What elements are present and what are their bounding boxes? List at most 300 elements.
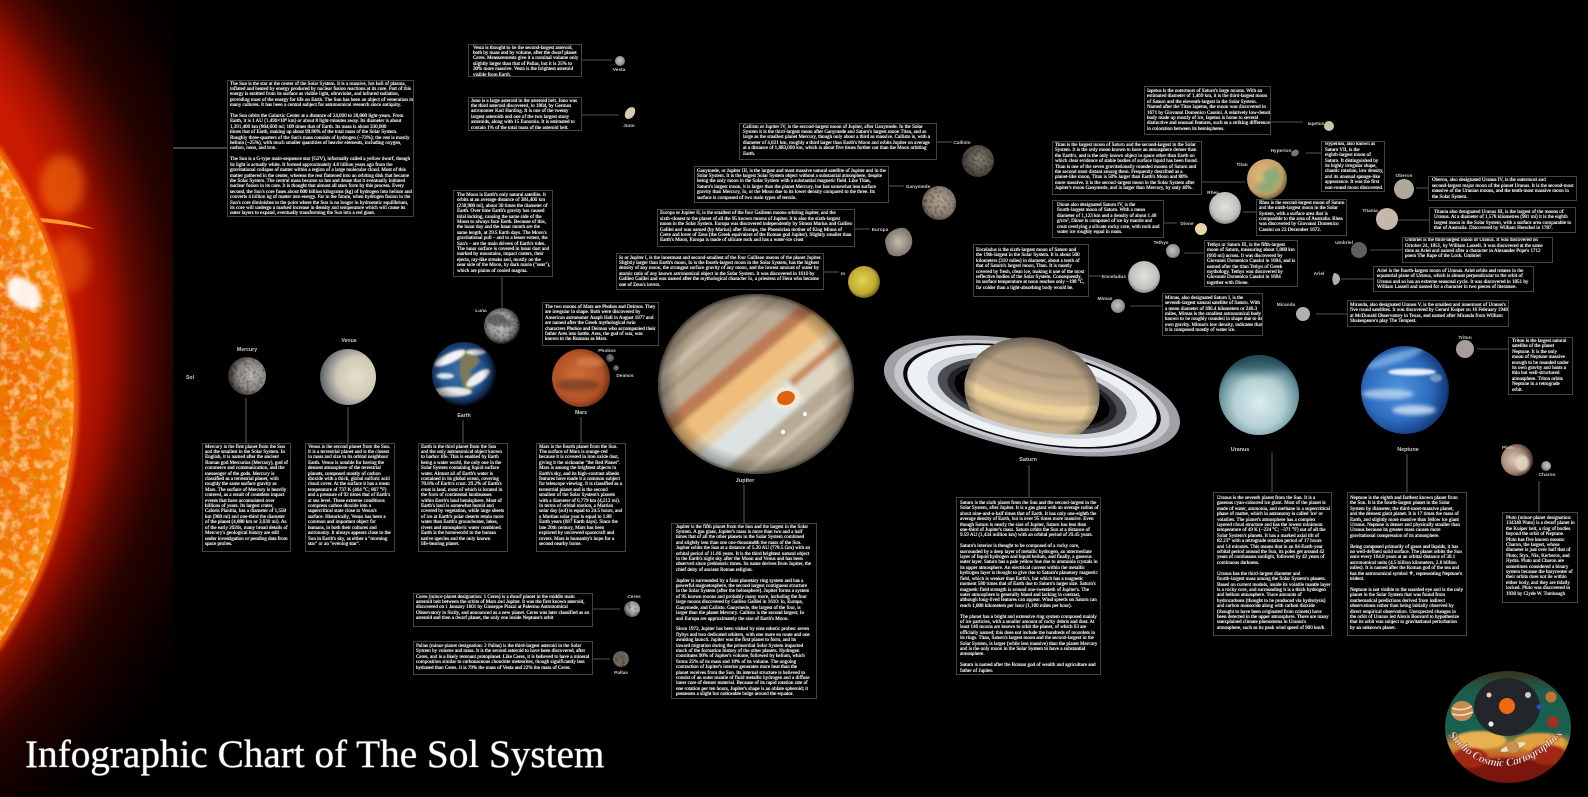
text block: Mimas: known to be roughly rounded in shape due to its: [1165, 316, 1262, 322]
text block: Venus: common and important object for: [308, 519, 376, 525]
asteroid: Juno: [623, 105, 637, 129]
text block: Neptune: observations rather than being initially observed by: [1350, 603, 1454, 609]
moon: Luna: [475, 308, 520, 344]
text block: Rhea: and the ninth-largest moon in the Solar: [1259, 205, 1338, 211]
text block: Venus: densest atmosphere of the terrestrial: [308, 465, 381, 471]
text block: Europa: Earth's Moon, Europa is made of silicate rock and has a water-ice crust: [660, 237, 803, 243]
text block: Io: Slightly larger than Earth's moon, Io is the fourth-largest moon in the Solar System, has the highest: [619, 260, 819, 266]
text block: Callisto: [739, 123, 937, 160]
text block: Rhea: [1256, 199, 1347, 236]
text block: Hyperion: chaotic rotation, low density,: [1325, 168, 1383, 174]
moon: Ganymede: Ganymede: [906, 184, 931, 190]
text block: Sun: its light is actually white. It formed approximately 4.6 billion years ago from the: [230, 162, 392, 168]
text block: Iapetus: distinctive and unusual features, such as a striking difference: [1147, 120, 1270, 126]
text block: Venus: Venus is the second planet from the Sun.: [308, 444, 390, 450]
connector: Earth: [462, 420, 464, 443]
text block: Iapetus: body made up mostly of ice, Iapetus is home to several: [1147, 115, 1258, 121]
text block: Titania: Titania also designated Uranus III, is the largest of the moons of: [1434, 209, 1564, 215]
moon: Mimas: [1098, 296, 1125, 313]
moon: Enceladus: Enceladus: [1102, 274, 1126, 280]
text block: moons of Mars: [542, 302, 659, 346]
connector: Pallas: [593, 658, 610, 660]
text block: Triton: moon of Neptune massive: [1512, 354, 1565, 360]
text block: moons of Mars: father Ares into battle. Ares, the god of war, was: [545, 331, 643, 337]
the Sun: [0, 142, 95, 654]
text block: Pluto: 1930 by Clyde W. Tombaugh: [1506, 591, 1565, 597]
moon: Mimas: Mimas: [1098, 296, 1113, 302]
moon: Enceladus: [1102, 261, 1160, 293]
moon: Miranda: Miranda: [1277, 302, 1296, 308]
text block: Juno: astronomer Karl Harding. It is one of the twenty: [471, 108, 568, 114]
text block: Mars: second nearby home.: [539, 541, 582, 547]
text block: Rhea: comparable to the area of Australia. Rhea: [1259, 216, 1343, 222]
text block: Earth: of ice at Earth's polar deserts retain more: [421, 514, 504, 520]
text block: Neptune: mathematical predictions derived from indirect: [1350, 598, 1445, 604]
text block: Jupiter: observed since prehistoric times. Its name derives from Jupiter, the: [676, 561, 811, 567]
planet: Mercury: [228, 347, 266, 395]
text block: moons of Mars: The two moons of Mars are Phobos and Deimos. They: [545, 304, 655, 310]
text block: Tethys: together with Dione.: [1207, 280, 1249, 286]
text block: Jupiter: inward migration during the primordial Solar System impacted: [676, 643, 803, 649]
text block: Jupiter: Jupiter is the fifth planet from the Sun and the largest in the Solar: [676, 524, 808, 530]
text block: Ganymede: gravity than Mercury, Io, or the Moon due to its lower density compared to the three. Its: [697, 189, 875, 195]
text block: Moon: The Moon is Earth's only natural satellite. It: [457, 192, 546, 198]
text block: Pluto: the Kuiper belt, a ring of bodies: [1506, 526, 1570, 532]
text block: Saturn: The planet has a bright and extensive ring system composed mainly: [960, 614, 1097, 620]
text block: Hyperion: its highly irregular shape,: [1325, 163, 1377, 169]
text block: Mars: explored by uncrewed spacecraft and: [539, 530, 614, 536]
connector: Vesta: [582, 59, 612, 61]
text block: Saturn: field, which is weaker than Earth's, but which has a magnetic: [960, 576, 1083, 582]
text block: Earth: within Earth's land hemisphere. Most of: [421, 498, 502, 504]
text block: Dione: crust overlying a silicate rocky core, with rock and: [1057, 224, 1159, 230]
text block: Mimas: [1162, 293, 1263, 336]
text block: Sun: providing most of the energy for life on Earth. The Sun has been an object of veneration in: [230, 97, 413, 103]
text block: Juno: contain 1% of the total mass of the asteroid belt.: [471, 125, 569, 131]
text block: Saturn: layer of liquid hydrogen and liquid helium, and finally, a gaseous: [960, 554, 1092, 560]
text block: Moon: The lunar surface is covered in lunar dust and: [457, 246, 549, 252]
text block: Vesta: slightly larger than that of Pallas, but it is 25% to: [473, 61, 572, 67]
text block: Saturn: surrounded by a deep layer of metallic hydrogen, an intermediate: [960, 549, 1092, 555]
text block: Mimas: Mimas, also designated Saturn I, is the: [1165, 295, 1243, 301]
text block: Mimas: a mean diameter of 396.4 kilometers or 246.3: [1165, 306, 1257, 312]
text block: Neptune: gravitational compression of its atmosphere.: [1350, 533, 1440, 539]
text block: Earth: and the only astronomical object known: [421, 449, 502, 455]
asteroid: Ceres: Ceres: [627, 594, 641, 600]
text block: Neptune: Uranus because its greater mass causes more: [1350, 527, 1441, 533]
text block: Neptune: Being composed primarily of gases and liquids, it has: [1350, 544, 1458, 550]
text block: Pluto: sometimes considered a binary: [1506, 564, 1568, 570]
text block: Jupiter: consist of an outer mantle of fluid metallic hydrogen and a diffuse: [676, 675, 809, 681]
text block: Earth: the form of continental landmasses: [421, 492, 492, 498]
text block: Saturn: average density of Earth, but is over 95 times more massive. Even: [960, 516, 1094, 522]
text block: Iapetus: estimated diameter of 1,469 km, it is the third-largest moon: [1147, 93, 1267, 99]
text block: Moon: gravitational pull – and to a lesser extent, the: [457, 235, 548, 241]
moon: Iapetus: Iapetus: [1308, 121, 1325, 127]
text block: Jupiter: planet receives from the Sun. Its internal structure is believed to: [676, 670, 805, 676]
text block: Hyperion: eighth-largest moon of: [1325, 152, 1371, 158]
text block: Venus: surface. Historically, Venus has been a: [308, 514, 386, 520]
connector: Iapetus: [1271, 121, 1303, 123]
text block: Enceladus: [973, 244, 1089, 297]
text block: Jupiter: and slightly less than one one-thousandth the mass of the Sun.: [676, 540, 801, 546]
text block: Neptune: planet in the Solar System that was found from: [1350, 592, 1445, 598]
text block: Mars: In terms of orbital motion, a Martian: [539, 503, 613, 509]
planet: Venus: [320, 338, 376, 405]
text block: Ganymede: Saturn's largest moon, it is larger than the planet Mercury, but has somewhat less surface: [697, 184, 876, 190]
text block: Triton: enough to be rounded under: [1512, 360, 1569, 366]
connector: Callisto: [937, 141, 952, 143]
text block: Pluto: Charon, the largest, whose: [1506, 542, 1560, 548]
text block: Pluto: Pluto (minor-planet designation:: [1506, 515, 1572, 521]
text block: Io: Galileo Galilei and was named after the mythological character Io, a priestess of Hera who became: [619, 276, 819, 282]
text block: Mercury: [202, 443, 291, 552]
text block: Jupiter: flybys and two dedicated orbiters, with one more en route and one: [676, 632, 810, 638]
text block: Mars: features have made it a common subject: [539, 476, 620, 482]
text block: Callisto: large as the smallest planet Mercury, though only about a third as massive. Callisto is, with a: [743, 134, 930, 140]
text block: Mars: smallest of the Solar System's planets: [539, 492, 615, 498]
text block: Mars: Mars is among the brightest objects in: [539, 465, 616, 471]
text block: Pluto: system because the barycenter of: [1506, 569, 1573, 575]
text block: Io: density of any moon, the strongest surface gravity of any moon, and the lowest amount of water by: [619, 265, 819, 271]
text block: Mercury: and the smallest in the Solar System. In: [205, 449, 285, 455]
moon: Tethys: Tethys: [1153, 240, 1169, 246]
text block: Jupiter: of 95 known moons and probably many more, including the four: [676, 594, 807, 600]
connector: Dione: [1164, 222, 1177, 224]
text block: Venus: humans, in both their cultures and: [308, 525, 377, 531]
text block: Callisto: at a distance of 1,883,000 km, which is about five times further out than the Moon orbiting: [743, 145, 926, 151]
text block: moons of Mars: are named after the Greek mythological twin: [545, 320, 636, 326]
text block: Uranus: (thought to have been originated from comets) have: [1217, 609, 1322, 615]
moon: Deimos: Deimos: [616, 373, 634, 379]
text block: Mercury: cratered, as a result of countless impact: [205, 492, 284, 498]
text block: Hyperion: and its unusual sponge-like: [1325, 174, 1380, 180]
text block: Earth: 70.8% of Earth's crust. 29.2% of Earth's: [421, 481, 502, 487]
text block: Triton: [1508, 337, 1573, 395]
text block: Pluto: Pluto; Styx, Nix, Kerberos, and: [1506, 553, 1570, 559]
moon: Rhea: [1207, 190, 1241, 224]
connector: Europa: [855, 228, 870, 230]
text block: Dione: [1052, 200, 1164, 238]
text block: Sun: its core will undergo a marked increase in density and temperature which will cause its: [230, 205, 405, 211]
text block: Sun: matter gathered in the center, whereas the rest flattened into an orbiting disk that became: [230, 172, 409, 178]
moon: Oberon: Oberon: [1395, 173, 1413, 179]
text block: Moon: same length, at 29.5 Earth days. The Moon's: [457, 230, 547, 236]
text block: Triton: its own gravity and hosts a: [1512, 365, 1566, 371]
text block: Sun: nuclear fusion in its core. It is thought that almost all stars form by this process. Every: [230, 183, 404, 189]
text block: Sun: [227, 80, 414, 217]
text block: Moon: [453, 190, 553, 277]
text block: Europa: Europa or Jupiter II, is the smallest of the four Galilean moons orbiting Jupiter, and the: [660, 210, 836, 216]
text block: Neptune: by an unknown planet.: [1350, 625, 1396, 631]
text block: Titan: the second most distant among them. Frequently described as a: [1055, 169, 1183, 175]
text block: Venus: star" or an "evening star".: [308, 541, 360, 547]
text block: Europa: Galilei and was named (by Marius) after Europa, the Phoenician mother of King Minos of: [660, 227, 842, 233]
text block: Saturn: magnetic field strength is around one-twentieth of Jupiter's. The: [960, 586, 1089, 592]
text block: Mars: a Martian solar year is equal to 1.88: [539, 514, 612, 520]
text block: Sun: Sun's core diminishes to the point where the Sun is no longer in hydrostatic equilibrium,: [230, 200, 408, 206]
connector: Mimas: [1130, 305, 1162, 307]
moon: Miranda: [1277, 302, 1310, 321]
moon: Deimos: [613, 365, 634, 379]
text block: Neptune: astronomical units (4.5 billion kilometers, 2.8 billion: [1350, 560, 1457, 566]
text block: Earth: to harbor life. This is enabled by Earth: [421, 454, 499, 460]
moon: Charon: Charon: [1539, 472, 1555, 478]
text block: Uranus: Uranus is the seventh planet from the Sun. It is a: [1217, 495, 1315, 501]
text block: Mercury: Mercury's geological history are still: [205, 530, 279, 536]
text block: Saturn: hydrogen layer is thought to give rise to Saturn's planetary magnetic: [960, 570, 1098, 576]
text block: Mars: Mars is the fourth planet from the Sun.: [539, 444, 618, 450]
text block: Sun: inflated and heated by energy produced by nuclear fusion reactions at its core. Part of this: [230, 86, 411, 92]
text block: Pallas: [413, 641, 593, 675]
moon: Phobos: [598, 348, 616, 362]
text block: Uranus: unexplained climate phenomena in Uranus's: [1217, 619, 1306, 625]
text block: Mercury: classified as a terrestrial planet, with: [205, 476, 279, 482]
text block: Neptune: System by diameter, the third-most-massive planet,: [1350, 506, 1454, 512]
text block: Enceladus: reflective bodies of the Solar System. Consequently,: [976, 274, 1082, 280]
text block: Miranda: Shakespeare's play The Tempest.: [1350, 318, 1417, 324]
text block: Titania: [1429, 207, 1576, 233]
text block: Mercury: Roman god Mercurius (Mercury), god of: [205, 460, 288, 466]
moon: Titania: Titania: [1362, 208, 1378, 214]
moon: Io: Io: [841, 271, 845, 277]
connector: Sun: [173, 147, 227, 149]
text block: Enceladus: covered by fresh, clean ice, making it one of the most: [976, 269, 1084, 275]
text block: Uranus: atmosphere, such as its peak wind speed of 900 km/h: [1217, 625, 1324, 631]
text block: Uranus: made of water, ammonia, and methane in a supercritical: [1217, 506, 1330, 512]
moon: Umbriel: [1335, 240, 1367, 258]
text block: Neptune: the Sun. It is the fourth-largest planet in the Solar: [1350, 500, 1450, 506]
connector: Oberon: [1416, 187, 1428, 189]
planet: Mars: [552, 349, 610, 416]
text block: Jupiter: Since 1973, Jupiter has been visited by nine robotic probes: seven: [676, 626, 809, 632]
text block: Moon: marked by mountains, impact craters, their: [457, 251, 543, 257]
moon: Titan: Titan: [1236, 162, 1248, 168]
text block: Mercury: English, it is named after the ancient: [205, 454, 279, 460]
text block: Rhea: Rhea is the second-largest moon of Saturn: [1259, 200, 1344, 206]
text block: Uranus: Based on current models, inside its volatile mantle layer: [1217, 582, 1330, 588]
text block: Juno: [468, 97, 582, 131]
text block: Pluto: 134340 Pluto) is a dwarf planet in: [1506, 520, 1575, 526]
text block: Oberon: [1428, 176, 1577, 201]
text block: Hyperion: Hyperion, also known as: [1325, 141, 1375, 147]
text block: Saturn: though Saturn is nearly the size of Jupiter, Saturn has less than: [960, 522, 1086, 528]
text block: Juno: largest asteroids and one of the two largest stony: [471, 114, 569, 120]
text block: Earth: life-bearing planet.: [421, 541, 459, 547]
text block: Saturn: its rings. Titan, Saturn's largest moon and the second-largest in the: [960, 635, 1094, 641]
text block: Uranus: and 14 minutes. This means that in an 84-Earth-year: [1217, 544, 1323, 550]
text block: Neptune: trident.: [1350, 576, 1364, 582]
text block: Mercury: Mars. The surface of Mercury is heavily: [205, 487, 286, 493]
text block: Rhea: System, with a surface area that is: [1259, 210, 1328, 216]
connector: Uranus: [1271, 452, 1273, 492]
text block: Uranus: Solar System's planets. It has a marked axial tilt of: [1217, 533, 1319, 539]
text block: Enceladus: far colder than a light-absorbing body would be.: [976, 285, 1074, 291]
text block: Mercury: space probes.: [205, 541, 232, 547]
text block: Saturn: 9.59 AU (1,434 million km) with an orbital period of 29.45 years.: [960, 532, 1093, 538]
moon: Oberon: [1394, 173, 1414, 199]
text block: Moon: orbits at an average distance of 384,400 km: [457, 197, 545, 203]
text block: Saturn: and is the only moon in the Solar System to have a substantial: [960, 646, 1085, 652]
text block: Miranda: five round satellites. It was discovered by Gerard Kuiper on 16 February 1948: [1350, 307, 1508, 313]
planet: Venus: Venus: [341, 338, 357, 344]
text block: Neptune: Earth, and slightly more massive than fellow ice giant: [1350, 517, 1459, 523]
text block: Venus: astronomy. It always appears close to the: [308, 530, 391, 536]
text block: Tethys: named after the titan Tethys of Greek: [1207, 264, 1282, 270]
text block: Enceladus: Enceladus is the sixth-largest moon of Saturn and: [976, 247, 1076, 253]
text block: Earth: Earth's land is somewhat humid and: [421, 503, 494, 509]
text block: Enceladus: its surface temperature at noon reaches only −198 °C,: [976, 279, 1084, 285]
text block: Venus: Earth. Venus is notable for having the: [308, 460, 384, 466]
text block: Saturn: outer atmosphere is generally bland and lacking in contrast,: [960, 592, 1080, 598]
text block: Hyperion: non-round moon discovered.: [1325, 185, 1383, 191]
text block: Uranus: layered cloud structure and has the lowest minimum: [1217, 522, 1323, 528]
text block: Uranus: gaseous cyan-coloured ice giant. Most of the planet is: [1217, 500, 1326, 506]
text block: Titan: [1052, 141, 1202, 195]
text block: Saturn: about nine-and-a-half times that of Earth. It has only one-eighth the: [960, 511, 1096, 517]
text block: Moon: near side of the Moon, by dark maria ("seas"),: [457, 262, 550, 268]
text block: Uranus: 82.23° with a retrograde rotation period of 17 hours: [1217, 538, 1321, 544]
text block: Neptune: that its orbit was subject to gravitational perturbation: [1350, 619, 1457, 625]
text block: Venus: cloud cover. At the surface it has a mean: [308, 481, 390, 487]
text block: Callisto: Callisto or Jupiter IV, is the second-largest moon of Jupiter, after Ganymede. In the Solar: [743, 124, 923, 130]
text block: Dione: fourth-largest moon of Saturn. With a mean: [1057, 207, 1145, 213]
text block: Europa: sixth-closest to the planet of all the 95 known moons of Jupiter. It is also the sixth-largest: [660, 216, 840, 222]
text block: Saturn: one-third of Jupiter's mass. Saturn orbits the Sun at a distance of: [960, 527, 1090, 533]
text block: Earth: water. Almost all of Earth's water is: [421, 471, 493, 477]
moon: Ganymede: [906, 184, 956, 220]
logo: Studio Cosmic Cartographics badge: Studio Cosmic Cartographics: [1448, 731, 1562, 766]
text block: Dione: g/cm³, Dione is composed of ice by mantle and: [1057, 218, 1152, 224]
text block: Jupiter: contraction of Jupiter's interior generates more heat than the: [676, 664, 797, 670]
moon: Phobos: Phobos: [598, 348, 616, 354]
asteroid: Ceres: [624, 594, 641, 617]
text block: Vesta: both by mass and by volume, after the dwarf planet: [473, 50, 577, 56]
text block: Uranus: hydrocarbons (thought to be produced via hydrolysis): [1217, 598, 1326, 604]
moon: Luna: Luna: [475, 308, 487, 314]
text block: Ariel: Ariel is the fourth-largest moon of Uranus. Ariel orbits and rotates in the: [1377, 268, 1523, 274]
moon: Hyperion: [1271, 148, 1300, 158]
text block: Neptune: [1347, 492, 1467, 636]
text block: Sun: gravitational collapse of matter within a region of a large molecular cloud. Most of this: [230, 167, 406, 173]
text block: Oberon: Oberon, also designated Uranus IV, is the outermost and: [1432, 177, 1546, 183]
text block: Neptune: Neptune is the eighth and farthest known planet from: [1350, 495, 1458, 501]
text block: Mars: The surface of Mars is orange-red: [539, 449, 608, 455]
text block: Miranda: Miranda, also designated Uranus V, is the smallest and innermost of Uranus's: [1350, 302, 1506, 308]
connector: Miranda: [1316, 313, 1347, 315]
connector: Pluto: [1538, 481, 1540, 512]
text block: Sun: carbon, neon, and iron.: [230, 145, 277, 151]
text block: Vesta: Vesta is thought to be the second-largest asteroid,: [473, 45, 573, 51]
moon: Europa: [872, 227, 912, 256]
text block: Earth: rivers and atmospheric water combined.: [421, 525, 502, 531]
connector: Mars: [580, 417, 582, 443]
text block: Mercury: commerce and communication, and the: [205, 465, 284, 471]
moon: Titan: [1236, 159, 1287, 199]
text block: Uranus: [1213, 492, 1332, 636]
text block: Mars: because it is covered in iron oxide dust,: [539, 454, 619, 460]
text block: Jupiter: System. A gas giant, Jupiter's mass is more than two and a half: [676, 529, 803, 535]
text block: Ariel: William Lassell and named for a character in two pieces of literature.: [1377, 284, 1517, 290]
text block: Io: Io or Jupiter I, is the innermost and second-smallest of the four Galilean moons of the planet Jupiter.: [619, 255, 822, 261]
text block: Pallas: hydrated than Ceres. It is 79% the mass of Vesta and 22% the mass of Ceres.: [416, 665, 571, 671]
connector: Ganymede: [889, 185, 904, 187]
text block: Moon: Moon to always face Earth. Because of this,: [457, 219, 546, 225]
text block: Callisto: Earth.: [743, 151, 755, 157]
text block: Venus: [305, 443, 395, 552]
text block: Titan: planet-like moon, Titan is 50% larger than Earth's Moon and 80%: [1055, 174, 1188, 180]
text block: Venus: compress carbon dioxide into a: [308, 503, 371, 509]
planet: Uranus: Uranus: [1231, 447, 1249, 453]
text block: Iapetus: 1671 by Giovanni Domenico Cassini. A relatively low-density: [1147, 110, 1271, 116]
text block: Sun: The Sun is a G-type main-sequence star (G2V), informally called a yellow dwarf, though: [230, 156, 410, 162]
asteroid: Pallas: [613, 651, 629, 676]
text block: Ceres: [413, 593, 593, 627]
connector: Jupiter: [743, 485, 745, 523]
moon: Dione: Dione: [1180, 221, 1194, 227]
text block: Ganymede: Solar System. It is the largest Solar System object without a substantial atmosphere, despite: [697, 173, 882, 179]
text block: Mars: [536, 443, 626, 552]
text block: Mars: giving it the nickname "the Red Planet".: [539, 460, 620, 466]
text block: Pluto: their orbits does not lie within: [1506, 574, 1567, 580]
text block: Umbriel: [1402, 237, 1553, 263]
text block: Umbriel: poem The Rape of the Lock. Umbriel: [1405, 253, 1481, 259]
text block: Iapetus: Named after the Titan Iapetus, the moon was discovered in: [1147, 104, 1266, 110]
text block: Callisto: diameter of 4,821 km, roughly a third larger than Earth's Moon and orbits Jupiter on average: [743, 140, 930, 146]
text block: Sun: times that of Earth, making up about 99.86% of the total mass of the Solar System.: [230, 129, 397, 135]
text block: Mercury: roughly the same surface gravity as: [205, 481, 277, 487]
text block: Titan: Jupiter's moon Ganymede, and is larger than Mercury, by only 40%.: [1055, 185, 1193, 191]
text block: Oberon: massive of the Uranian moons, and the tenth-most massive moon in: [1432, 188, 1569, 194]
text block: Hyperion: appearance. It was the first: [1325, 179, 1379, 185]
text block: moons of Mars: American astronomer Asaph Hall in August 1877 and: [545, 315, 653, 321]
asteroid: Vesta: Vesta: [613, 67, 626, 73]
text block: Jupiter: much of the formation history of the other planets. Hydrogen: [676, 648, 799, 654]
text block: Hyperion: Saturn VII, is the: [1325, 147, 1360, 153]
moon: Charon: [1539, 461, 1555, 478]
connector: Triton: [1477, 348, 1508, 350]
text block: Europa: moon in the Solar System. Europa was discovered independently by Simon Marius and Galileo: [660, 221, 852, 227]
text block: Jupiter: in the Solar System (after the heliosphere). Jupiter forms a system: [676, 588, 809, 594]
text block: Moon: Sun's – are the main drivers of Earth's tides.: [457, 241, 546, 247]
text block: Sun: energy is emitted from its surface as visible light, ultraviolet, and infrared radiation,: [230, 91, 399, 97]
sun glow: [0, 0, 173, 797]
connector: Rhea: [1243, 211, 1256, 213]
text block: Mimas: own gravity. Mimas's low density, indicates that: [1165, 322, 1262, 328]
text block: Vesta: 30% more massive. Vesta is the brightest asteroid: [473, 66, 573, 72]
moon: Rhea: Rhea: [1207, 190, 1219, 196]
text block: Sun: many cultures. It has been a central subject for astronomical research since antiquity.: [230, 102, 401, 108]
text block: Neptune: miles). It is named after the Roman god of the sea and: [1350, 565, 1459, 571]
text block: Callisto: System it is the third-largest moon after Ganymede and Saturn's largest moon Titan, and as: [743, 129, 926, 135]
text block: Mars: rovers. Mars is humanity's hope for a: [539, 536, 614, 542]
text block: Titan: which clear evidence of stable bodies of surface liquid has been found.: [1055, 158, 1198, 164]
text block: Ganymede: surface is composed of two main types of terrain.: [697, 195, 797, 201]
text block: Mars: Earth's sky, and its high-contrast albedo: [539, 471, 619, 477]
text block: Io: one of Zeus's lovers.: [619, 282, 661, 288]
title: Infographic Chart of The Sol System: [25, 733, 604, 776]
text block: Rhea: Cassini on 23 December 1672.: [1259, 227, 1321, 233]
text block: Pallas: System by volume and mass. It is the second asteroid to have been discovered, after: [416, 648, 585, 654]
planet: Saturn with rings: Saturn: [1019, 457, 1037, 463]
text block: Saturn: Solar System, is larger (while less massive) than the planet Mercury: [960, 641, 1097, 647]
text block: Umbriel: October 24, 1851, by William Lassell. It was discovered at the same: [1405, 243, 1543, 249]
connector: Ariel: [1341, 278, 1373, 280]
text block: Neptune: the orbit of Uranus led Alexis Bouvard to hypothesize: [1350, 614, 1459, 620]
text block: Ganymede: Ganymede, or Jupiter III, is the largest and most massive natural satellite of Jupiter and in the: [697, 168, 886, 174]
text block: Saturn: father of Jupiter.: [960, 668, 993, 674]
planet: Saturn with rings: [884, 336, 1180, 461]
